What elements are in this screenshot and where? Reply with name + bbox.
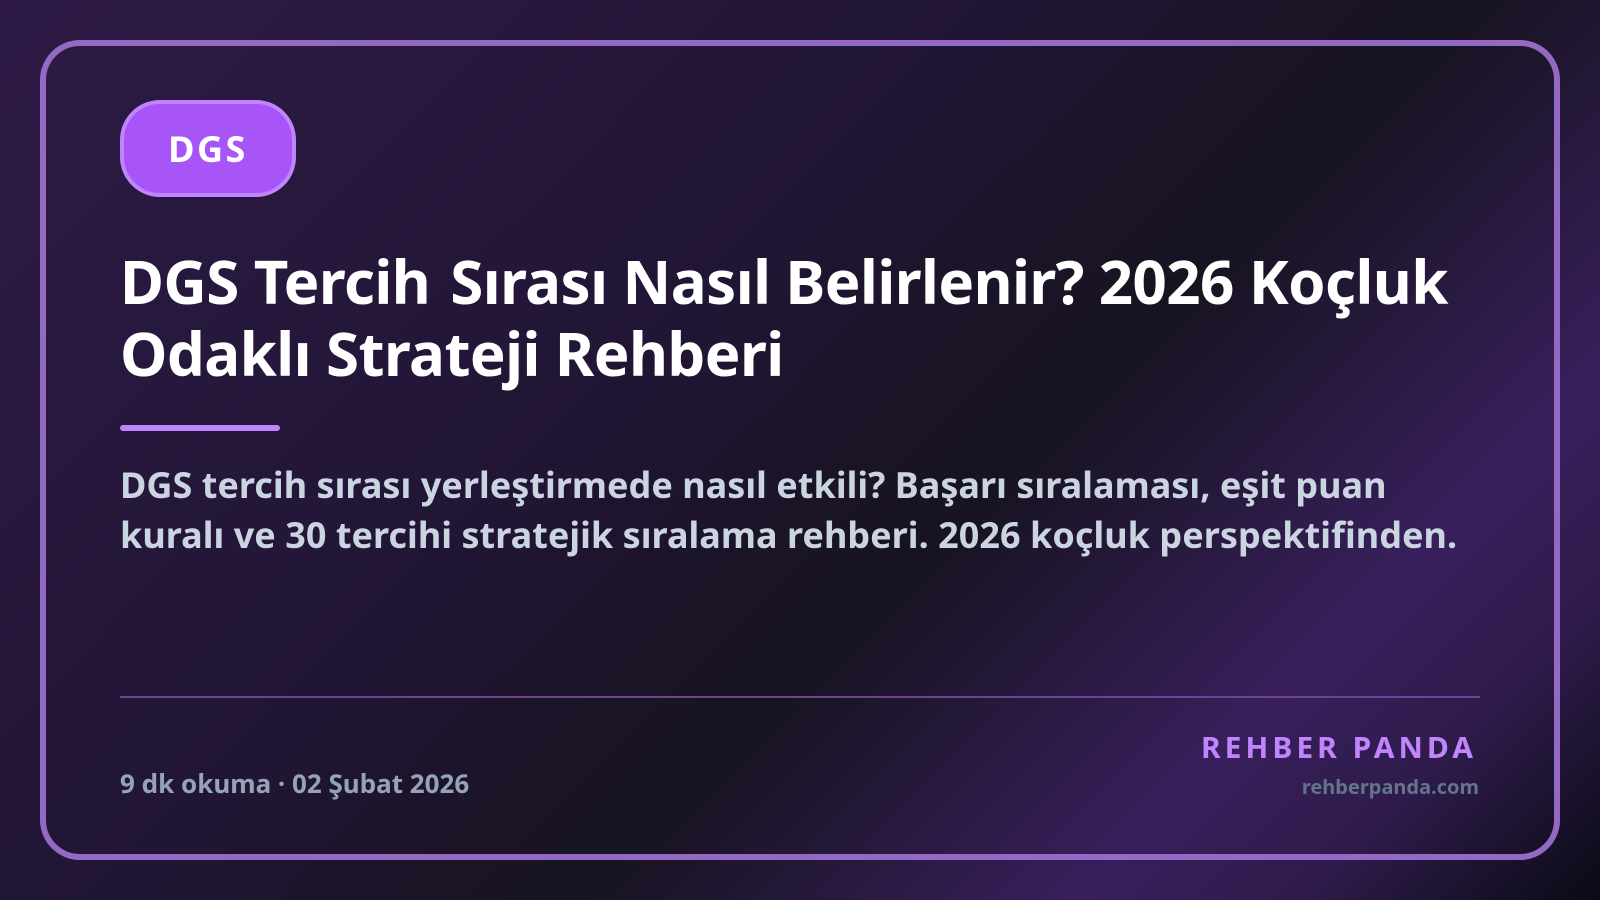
website: rehberpanda.com: [1302, 773, 1479, 800]
category badge: [120, 100, 296, 197]
title accent bar: [120, 425, 280, 431]
description: [120, 460, 1457, 559]
title: DGS Tercih Sırası Nasıl Belirlenir? 2026 Koçluk: [120, 240, 1448, 322]
category badge: DGS: [168, 124, 248, 173]
description: kuralı ve 30 tercihi stratejik sıralama rehberi. 2026 koçluk perspektifinden.: [120, 510, 1457, 559]
brand name: REHBER PANDA: [1201, 726, 1477, 767]
title: Odaklı Strateji Rehberi: [120, 312, 784, 394]
title: [120, 240, 1448, 394]
reading time and date: 9 dk okuma · 02 Şubat 2026: [120, 765, 469, 801]
footer divider: [120, 696, 1480, 698]
description: DGS tercih sırası yerleştirmede nasıl etkili? Başarı sıralaması, eşit puan: [120, 460, 1387, 509]
